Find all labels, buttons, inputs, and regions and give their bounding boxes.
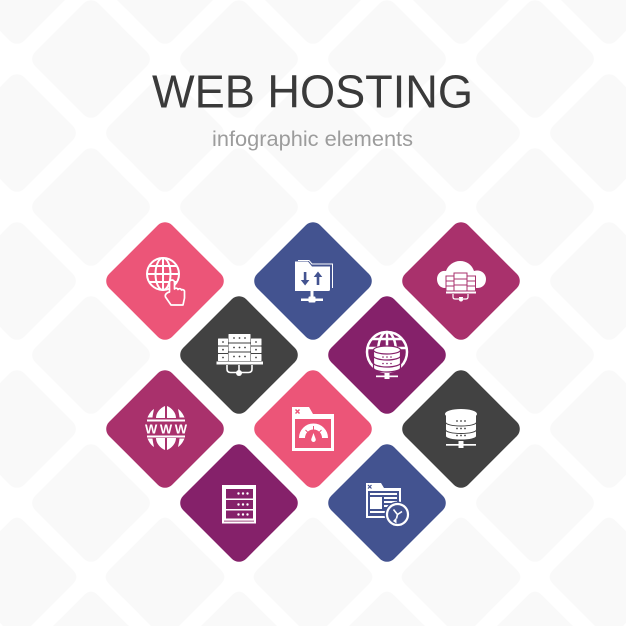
- subtitle: infographic elements: [212, 128, 413, 151]
- icon: browser window with clock: [366, 483, 410, 528]
- title: WEB HOSTING: [152, 66, 473, 118]
- icon: server rack: [222, 485, 256, 524]
- icon: database on network: [446, 410, 476, 448]
- panel: server cluster: [176, 292, 302, 418]
- icon: server cluster on network: [216, 334, 263, 376]
- icon: globe with hand cursor: [147, 258, 184, 305]
- panel: cloud servers: [398, 218, 524, 344]
- icon: cloud with servers: [437, 261, 486, 302]
- panel: globe database: [324, 292, 450, 418]
- icon: globe with database: [367, 332, 407, 379]
- panel: speed window: [250, 366, 376, 492]
- panel: scheduled window: [324, 440, 450, 566]
- panel: server rack: [176, 440, 302, 566]
- panel: database network: [398, 366, 524, 492]
- icon: shared folder with arrows: [295, 260, 332, 302]
- panel: folder transfer: [250, 218, 376, 344]
- icon: www globe: WWW: [145, 422, 188, 436]
- icon: browser speed gauge: [292, 407, 334, 451]
- panel: globe with pointer: [102, 218, 228, 344]
- panel: www globe: [102, 366, 228, 492]
